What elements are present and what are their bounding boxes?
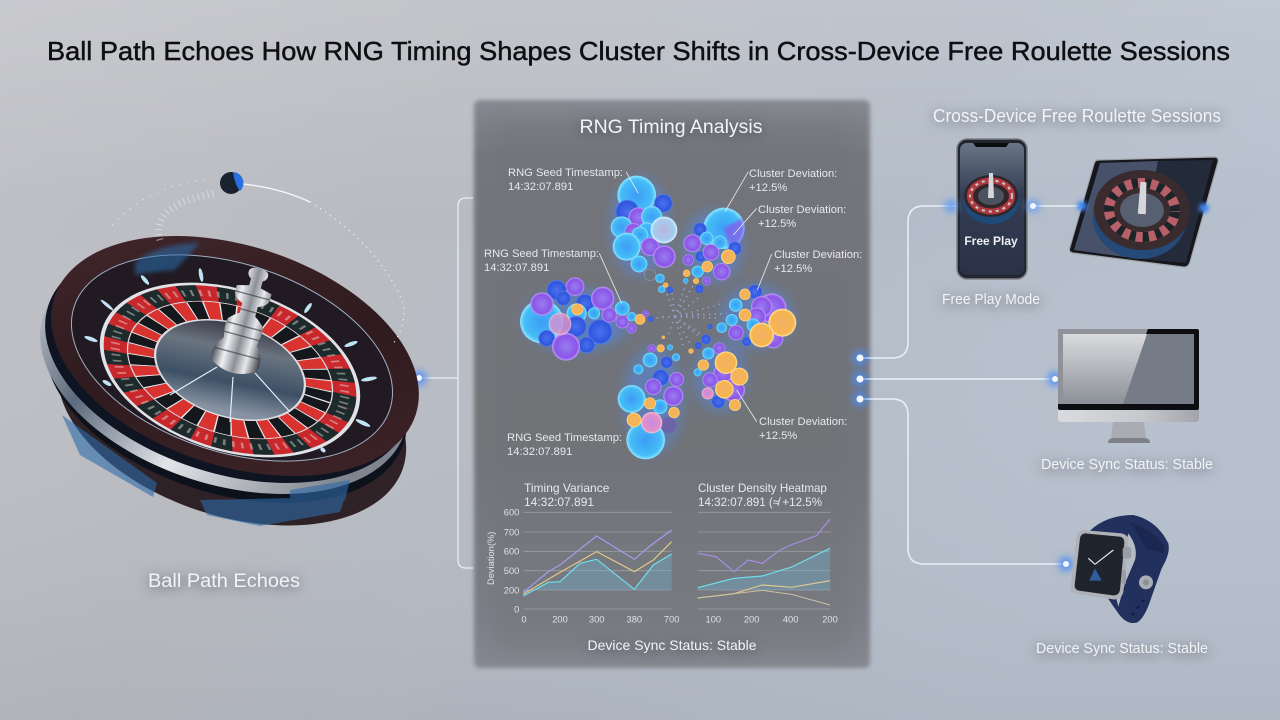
line chart: cluster density heatmap: Cluster Density Heatmap — [698, 482, 827, 495]
line chart: timing variance: 0 — [514, 604, 519, 614]
line chart: cluster density heatmap: 14:32:07.891 (≉ +12.5% — [698, 496, 822, 509]
line chart: timing variance: Deviation(%) — [486, 532, 496, 585]
label: cluster deviation 1: Cluster Deviation: — [749, 168, 837, 180]
line chart: timing variance: 600 — [504, 547, 519, 557]
top cluster — [611, 176, 677, 293]
panel footer status: Device Sync Status: Stable — [588, 637, 757, 653]
label: seed timestamp left: 14:32:07.891 — [484, 262, 549, 274]
line chart: cluster density heatmap: 200 — [744, 615, 759, 625]
line chart: timing variance: 700 — [504, 527, 519, 537]
bottom-right cluster — [688, 334, 748, 411]
glowing connector nodes — [853, 351, 1073, 571]
line chart: timing variance: 300 — [589, 615, 604, 625]
title: Ball Path Echoes How RNG Timing Shapes Cluster Shifts in Cross-Device Free Roulette Sessions — [47, 36, 1230, 66]
left cluster — [520, 277, 654, 361]
label: desktop sync status: Device Sync Status: Stable — [1041, 457, 1213, 473]
line chart: cluster density heatmap: 100 — [706, 615, 721, 625]
line chart: cluster density heatmap: 400 — [783, 615, 798, 625]
top-right cluster — [683, 208, 745, 293]
phone text: Free Play — [964, 234, 1018, 248]
line chart: cluster density heatmap — [698, 482, 838, 625]
panel: RNG timing analysis — [474, 100, 870, 668]
label: seed timestamp bottom: RNG Seed Timestamp: — [507, 432, 622, 444]
bubble cluster chart — [520, 172, 796, 459]
label: seed timestamp top: RNG Seed Timestamp: — [508, 167, 623, 179]
line chart: cluster density heatmap: 200 — [822, 615, 838, 625]
line chart: timing variance: 500 — [504, 566, 519, 576]
wheel body — [9, 202, 441, 567]
label: cluster deviation 4: Cluster Deviation: — [759, 416, 847, 428]
connectors: panel to devices — [860, 206, 1082, 564]
leader lines — [599, 172, 772, 422]
panel heading: RNG Timing Analysis — [580, 117, 762, 138]
line chart: timing variance: 0 — [521, 615, 527, 625]
line chart: timing variance — [486, 481, 679, 625]
line chart: timing variance: 600 — [504, 508, 519, 518]
label: cluster deviation 4: +12.5% — [759, 430, 797, 442]
diamond markers — [84, 268, 377, 453]
label: cluster deviation 2: +12.5% — [758, 218, 796, 230]
icon: smartwatch — [1071, 515, 1169, 623]
number ring and pockets — [77, 252, 383, 488]
bottom cluster — [618, 336, 684, 459]
phone mini wheel — [963, 173, 1019, 224]
label: cluster deviation 3: Cluster Deviation: — [774, 249, 862, 261]
label: seed timestamp top: 14:32:07.891 — [508, 181, 573, 193]
devices heading: Cross-Device Free Roulette Sessions — [933, 106, 1221, 126]
label: free play mode: Free Play Mode — [942, 291, 1040, 308]
wood rim — [20, 193, 450, 519]
icon: phone — [945, 139, 1039, 279]
label: cluster deviation 1: +12.5% — [749, 182, 787, 194]
line chart: timing variance: 200 — [504, 585, 519, 595]
spindle — [208, 262, 284, 379]
line chart: timing variance: 380 — [627, 615, 642, 625]
roulette wheel — [9, 193, 450, 567]
cone reflections — [170, 367, 290, 422]
label: ball path echoes: Ball Path Echoes — [148, 571, 300, 592]
ball and particle trail — [112, 172, 404, 345]
holographic side panels — [62, 415, 350, 526]
line chart: timing variance: 200 — [552, 615, 568, 625]
label: seed timestamp left: RNG Seed Timestamp: — [484, 248, 599, 260]
line chart: timing variance: 14:32:07.891 — [524, 495, 594, 509]
label: cluster deviation 2: Cluster Deviation: — [758, 204, 846, 216]
connector: wheel to panel — [412, 198, 473, 568]
icon: tablet — [1069, 157, 1218, 267]
label: watch sync status: Device Sync Status: Stable — [1036, 641, 1208, 657]
icon: desktop monitor — [1058, 329, 1199, 443]
line chart: timing variance: Timing Variance — [524, 481, 609, 495]
line chart: timing variance: 700 — [664, 615, 679, 625]
right cluster — [707, 284, 796, 348]
label: seed timestamp bottom: 14:32:07.891 — [507, 446, 572, 458]
label: cluster deviation 3: +12.5% — [774, 263, 812, 275]
inner bowl — [45, 217, 419, 499]
tablet mini wheel — [1091, 167, 1192, 261]
